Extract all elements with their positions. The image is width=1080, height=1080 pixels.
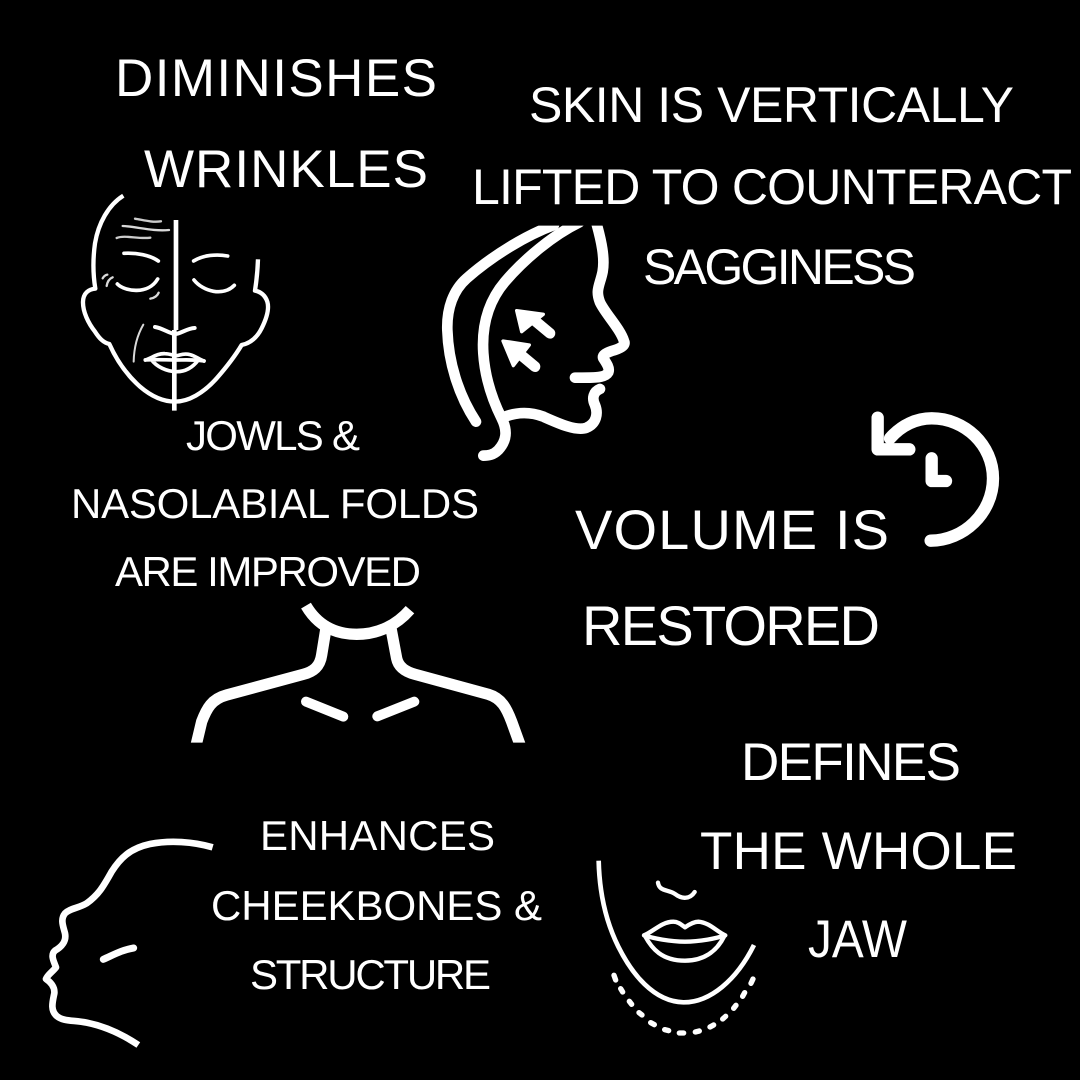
heading: enhances cheekbones: CHEEKBONES & [211,882,542,929]
heading: defines the whole jaw: JAW [808,910,907,969]
heading: skin is vertically lifted: SAGGINESS [643,239,916,295]
icon: profile face with lift arrows [447,222,624,456]
heading: volume is restored: RESTORED [582,594,880,657]
heading: volume is restored: VOLUME IS [575,498,889,561]
heading: defines the whole jaw [700,733,1017,969]
heading: skin is vertically lifted: LIFTED TO COUNTERACT [472,159,1072,215]
heading: defines the whole jaw: DEFINES [741,733,961,792]
heading: jowls and nasolabial folds: NASOLABIAL FOLDS [71,480,479,527]
heading: volume is restored [575,498,889,657]
icon: half-wrinkled face [83,196,268,411]
heading: jowls and nasolabial folds: ARE IMPROVED [115,548,421,595]
heading: diminishes wrinkles [115,49,437,199]
icon: jawline with lips and dotted contour [599,861,754,1033]
heading: jowls and nasolabial folds: JOWLS & [186,412,360,459]
heading: enhances cheekbones [211,812,542,998]
heading: diminishes wrinkles: WRINKLES [144,140,428,199]
icon: neck and shoulders [195,606,521,748]
heading: enhances cheekbones: ENHANCES [260,812,495,859]
heading: skin is vertically lifted: SKIN IS VERTICALLY [529,77,1014,133]
icon: clock with return arrow [878,418,993,541]
heading: jowls and nasolabial folds [71,412,479,595]
heading: enhances cheekbones: STRUCTURE [250,951,491,998]
heading: skin is vertically lifted [472,77,1072,295]
icon: side profile with cheekbone [46,842,213,1045]
heading: defines the whole jaw: THE WHOLE [700,822,1017,881]
heading: diminishes wrinkles: DIMINISHES [115,49,437,108]
